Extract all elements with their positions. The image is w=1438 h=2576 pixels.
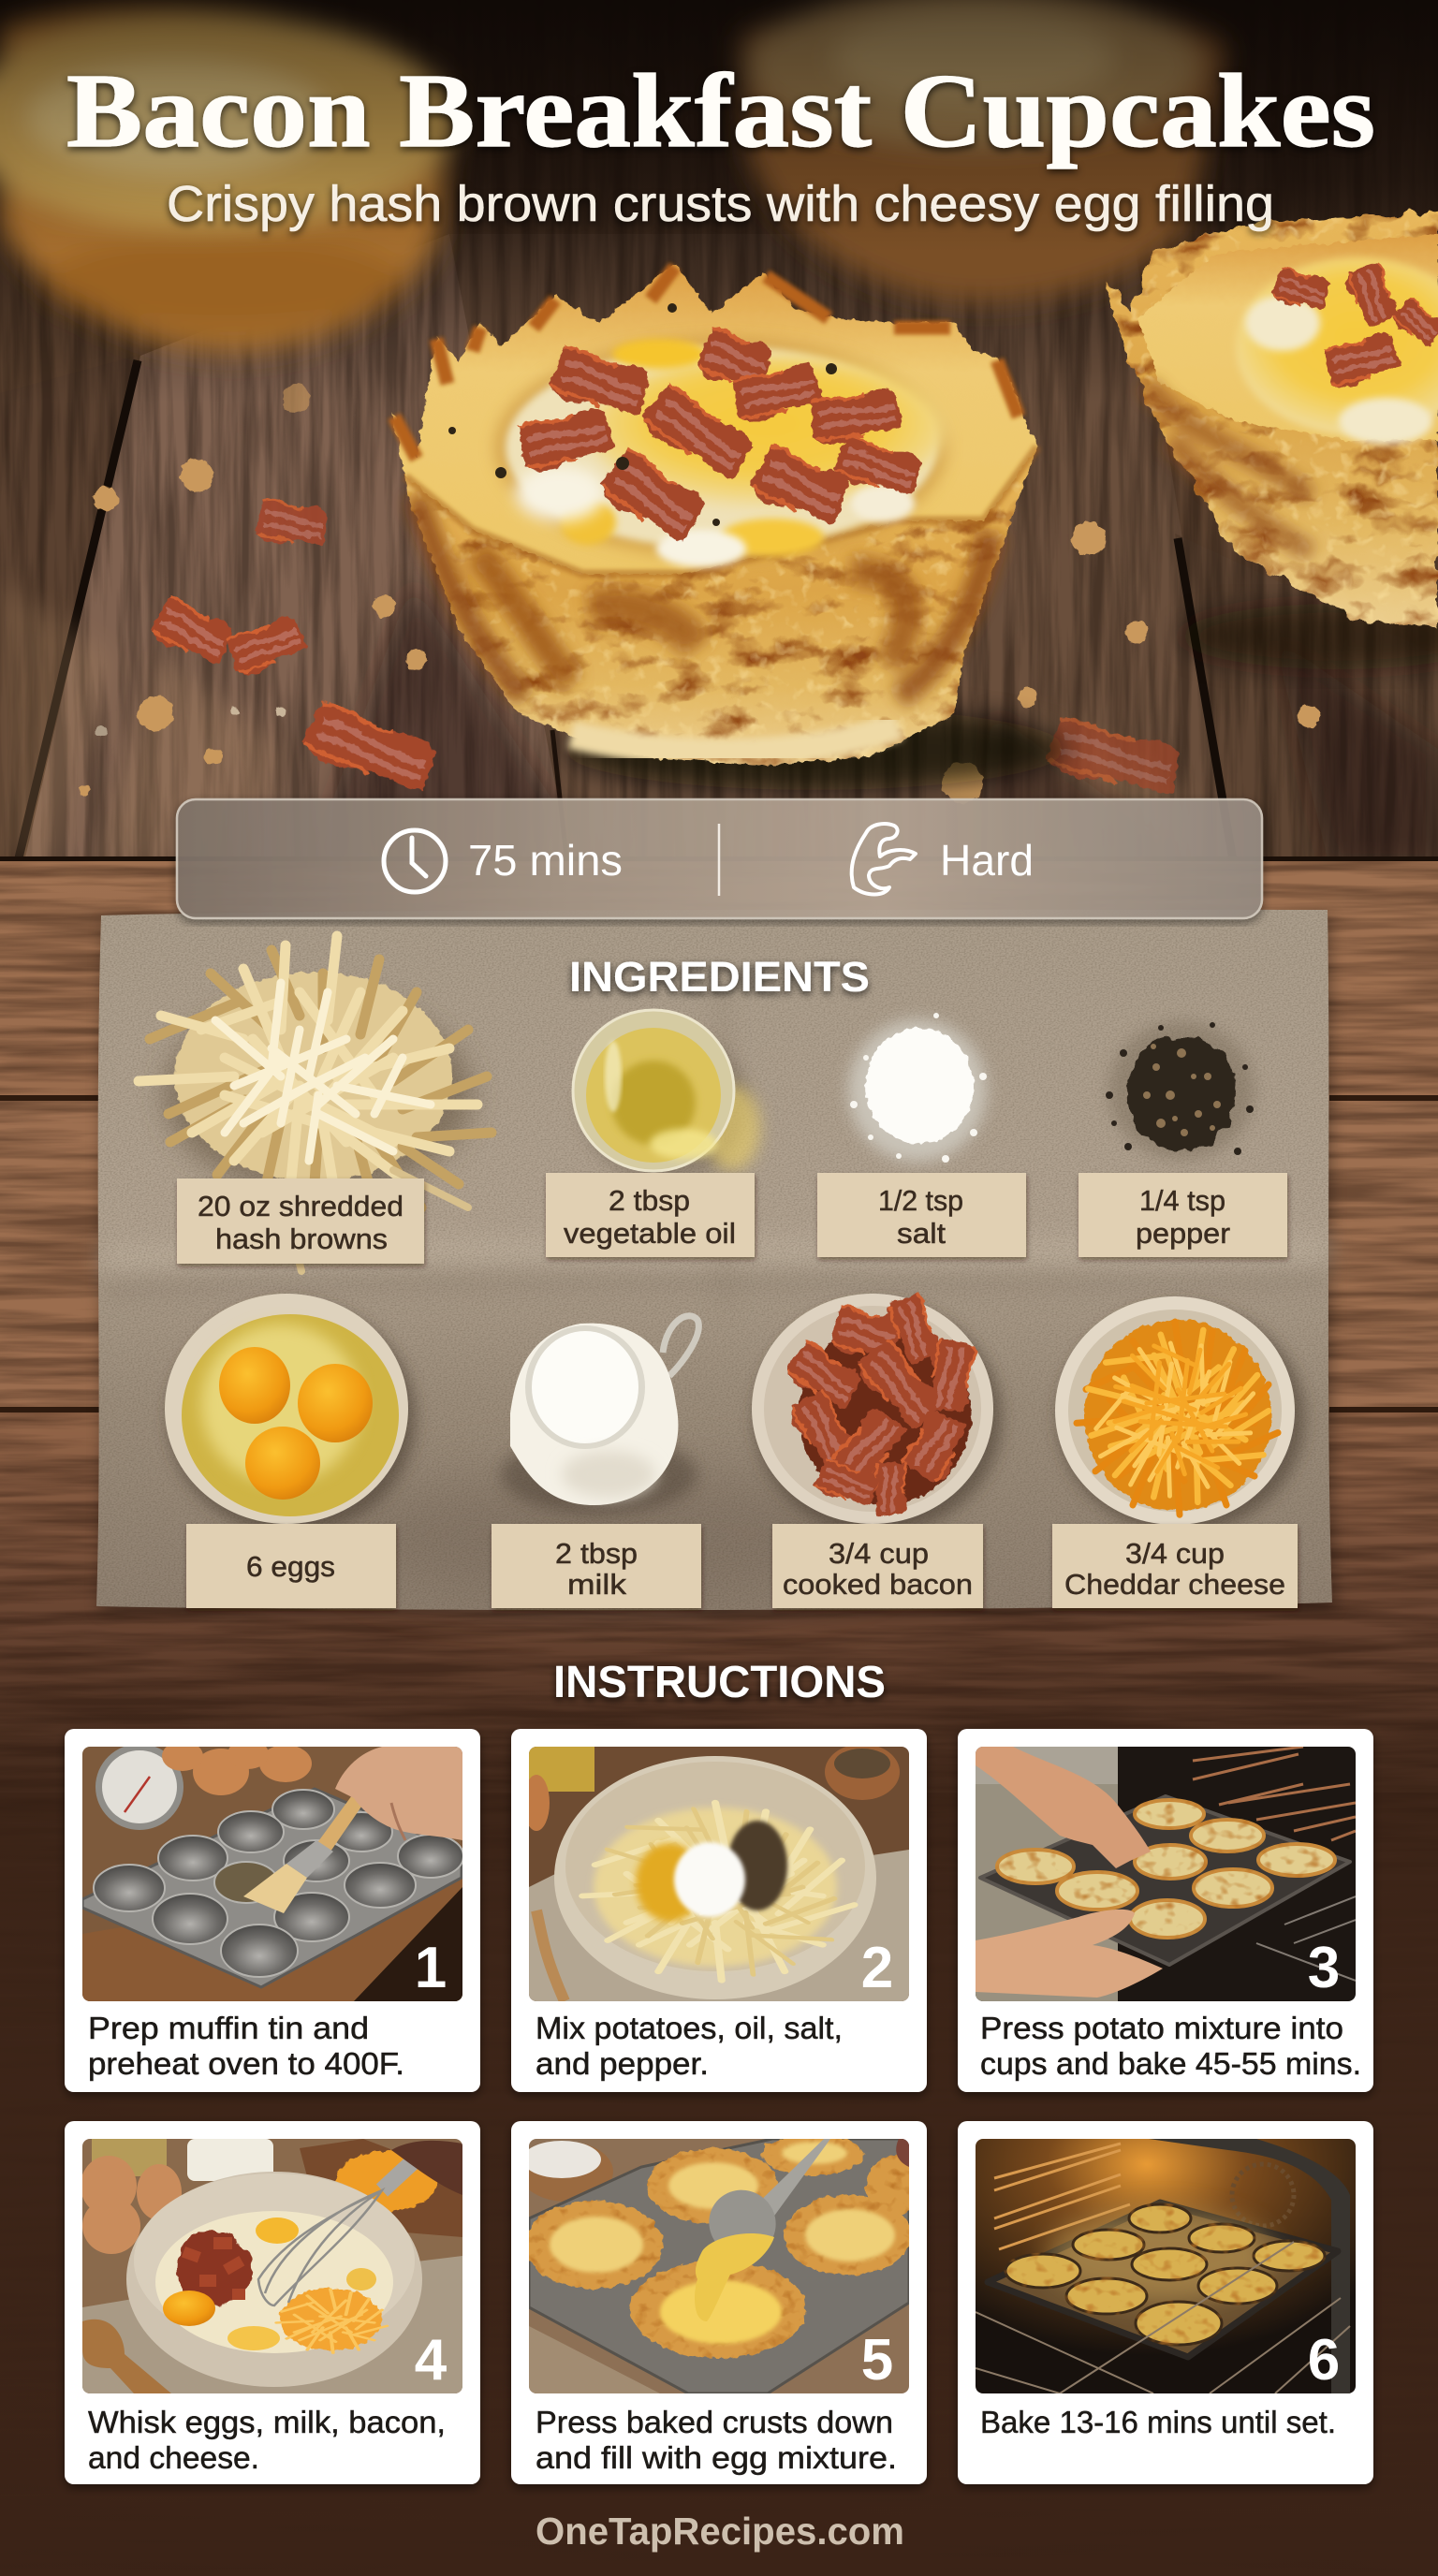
step 4 text: Whisk eggs, milk, bacon, [88, 2405, 446, 2439]
heading: ingredients: INGREDIENTS [569, 953, 870, 1001]
cook time: 75 mins [468, 836, 623, 885]
label: milk: milk [567, 1568, 627, 1601]
stats bar [177, 799, 1262, 918]
label: cheddar [1052, 1524, 1298, 1608]
step 4 photo: whisking filling [81, 2139, 462, 2393]
footer website: OneTapRecipes.com [536, 2510, 904, 2553]
step card 1 [65, 1729, 480, 2092]
label: salt: salt [897, 1217, 946, 1250]
step number 6: 6 [1308, 2328, 1340, 2393]
step card 2 [511, 1729, 927, 2092]
cupcake rim [392, 263, 1037, 574]
label: vegetable oil: vegetable oil [564, 1217, 736, 1250]
step 3 photo: pressing potato into tin [976, 1747, 1356, 2001]
ingredient: cooked bacon in bowl [752, 1292, 1002, 1534]
step 3 text: cups and bake 45-55 mins. [980, 2046, 1361, 2081]
step 1 text: preheat oven to 400F. [88, 2046, 404, 2081]
ingredient: vegetable oil [573, 1010, 760, 1181]
step 2 photo: mixing potatoes [523, 1744, 909, 2003]
ingredient: hash browns [139, 936, 492, 1271]
blurred cupcake, back left [0, 6, 454, 352]
step number 5: 5 [861, 2328, 893, 2393]
lower wood background [0, 856, 1438, 2576]
step 5 text [536, 2405, 897, 2475]
step 1 text: Prep muffin tin and [88, 2011, 369, 2045]
step 6 text: Bake 13-16 mins until set. [980, 2405, 1336, 2439]
step 1 photo: brushing muffin tin [82, 1739, 463, 2001]
label: hash browns [177, 1178, 424, 1264]
step 2 text [536, 2011, 843, 2081]
label: vegetable oil: 2 tbsp [609, 1184, 690, 1217]
step 6 photo: baking in oven [976, 2139, 1356, 2393]
step 4 text: and cheese. [88, 2440, 259, 2475]
step 3 text [980, 2011, 1361, 2081]
step 2 text: Mix potatoes, oil, salt, [536, 2011, 843, 2045]
cupcake, right side [1106, 211, 1438, 669]
difficulty: Hard [940, 836, 1034, 885]
label: eggs: 6 eggs [246, 1550, 335, 1583]
label: eggs [186, 1524, 396, 1608]
label: vegetable oil [546, 1173, 755, 1257]
subtitle: Crispy hash brown crusts with cheesy egg filling [167, 176, 1274, 232]
cupcake crust body [404, 446, 1037, 766]
ingredient: pepper [1106, 1021, 1255, 1160]
ingredient: milk jug [501, 1316, 698, 1514]
label: bacon: 3/4 cup [829, 1537, 929, 1570]
step 2 text: and pepper. [536, 2046, 709, 2081]
ingredient: cheddar in bowl [1055, 1296, 1305, 1532]
step card 3 [958, 1729, 1373, 2092]
label: pepper [1078, 1173, 1287, 1257]
step number 3: 3 [1308, 1936, 1340, 2000]
panel: linen cloth [94, 908, 1339, 1616]
heading: instructions: INSTRUCTIONS [553, 1658, 886, 1707]
label: pepper: pepper [1136, 1217, 1230, 1250]
label: hash browns: 20 oz shredded [198, 1190, 404, 1222]
icon: flexed arm [852, 824, 916, 895]
cupcake egg filling [494, 337, 947, 567]
label: cheddar: Cheddar cheese [1064, 1568, 1285, 1601]
label: bacon [772, 1524, 983, 1608]
step number 1: 1 [415, 1936, 447, 2000]
step card 5 [511, 2121, 927, 2484]
step 4 text [88, 2405, 446, 2475]
step 3 text: Press potato mixture into [980, 2011, 1343, 2045]
blurred cupcake, back centre [740, 0, 1226, 302]
step 5 text: Press baked crusts down [536, 2405, 893, 2439]
pepper flecks on cupcake [448, 303, 837, 526]
label: cheddar: 3/4 cup [1125, 1537, 1225, 1570]
label: milk: 2 tbsp [555, 1537, 638, 1570]
label: salt: 1/2 tsp [878, 1184, 963, 1217]
icon: clock [384, 830, 446, 892]
step number 2: 2 [861, 1936, 893, 2000]
label: bacon: cooked bacon [783, 1568, 973, 1601]
step 1 text [88, 2011, 404, 2081]
label: milk [492, 1524, 701, 1608]
step 5 text: and fill with egg mixture. [536, 2440, 897, 2475]
step number 4: 4 [415, 2328, 448, 2393]
step 5 photo: filling crusts [520, 2134, 922, 2393]
title: Bacon Breakfast Cupcakes [66, 53, 1375, 169]
step card 4 [65, 2121, 480, 2484]
title scrim over back cupcakes [0, 0, 1438, 253]
label: salt [817, 1173, 1026, 1257]
ingredient: salt [848, 1013, 987, 1163]
ingredient: eggs in bowl [165, 1294, 416, 1534]
label: pepper: 1/4 tsp [1139, 1184, 1225, 1217]
step card 6 [958, 2121, 1373, 2484]
bacon pieces on cupcake [516, 324, 925, 550]
main hash brown cupcake [392, 263, 1067, 790]
label: hash browns: hash browns [215, 1222, 388, 1255]
hero photo: wooden table with cupcakes [0, 0, 1438, 866]
bacon bits and crumbs on table [79, 384, 1320, 803]
